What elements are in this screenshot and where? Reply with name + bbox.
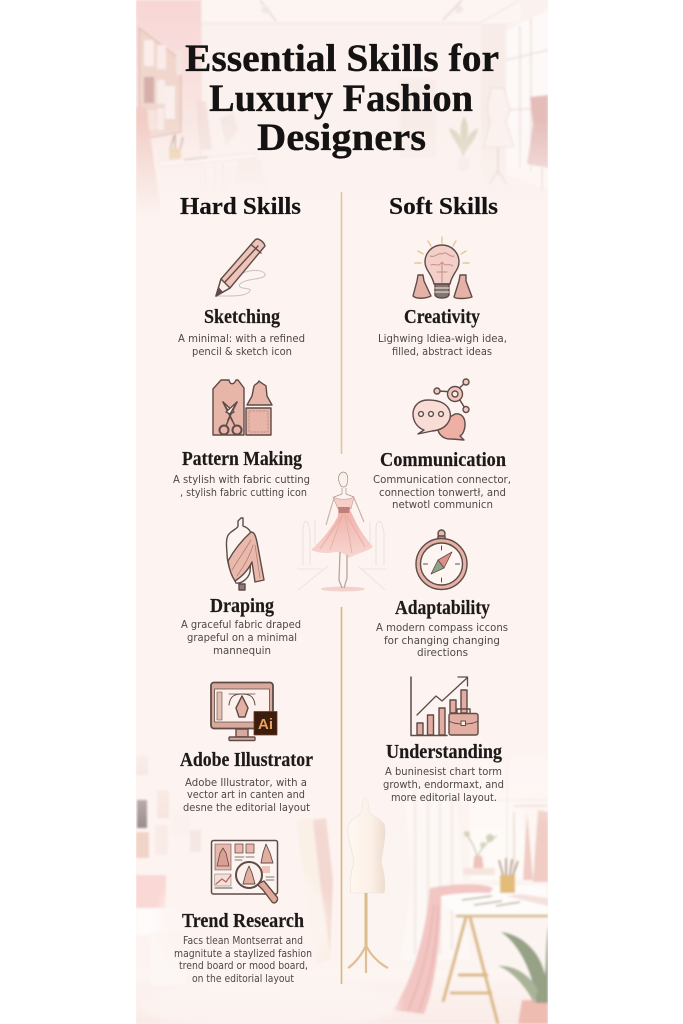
icon: speech bubbles and network xyxy=(413,379,469,440)
description: Lighwing ldiea-wigh idea, xyxy=(378,332,507,345)
panel: draping xyxy=(181,518,301,657)
panel: creativity xyxy=(378,237,507,358)
icon: light bulb with dresses xyxy=(413,237,472,298)
panel: pattern making xyxy=(173,380,310,499)
icon: mood board with magnifying glass xyxy=(212,840,278,903)
heading: Communication xyxy=(380,450,506,471)
icon: monitor with pen tool and Ai badge: Ai xyxy=(258,716,273,733)
heading: hard skills: Hard Skills xyxy=(180,194,301,220)
desk xyxy=(450,886,546,914)
fabric bolts xyxy=(296,818,332,966)
description xyxy=(178,332,305,358)
icon: mannequin with draped fabric xyxy=(226,518,264,590)
heading: Creativity xyxy=(404,307,480,328)
clothes rack xyxy=(514,806,548,882)
description: Facs tlean Montserrat and xyxy=(183,934,303,947)
description: pencil & sketch icon xyxy=(192,345,292,358)
description: netwotl communicn xyxy=(392,498,493,511)
heading: Adaptability xyxy=(395,598,490,619)
soft glow behind trend research text xyxy=(160,896,329,932)
icon: pencil and sketch line xyxy=(216,239,265,296)
draped pink fabric xyxy=(393,884,493,1014)
description xyxy=(378,332,507,358)
heading: soft skills: Soft Skills xyxy=(389,194,498,220)
description xyxy=(376,621,508,659)
description: magnitute a staylized fashion xyxy=(174,947,312,960)
description: filled, abstract ideas xyxy=(392,345,492,358)
panel: understanding xyxy=(383,677,504,804)
panel: trend research xyxy=(174,840,312,985)
description: Adobe Illustrator, with a xyxy=(185,776,307,789)
icon: pattern pieces and scissors xyxy=(213,380,272,435)
top studio room illustration xyxy=(136,0,548,220)
description: A buninesist chart torm xyxy=(385,765,502,778)
description: , stylish fabric cutting icon xyxy=(180,486,307,499)
description: Communication connector, xyxy=(373,473,511,486)
title xyxy=(185,37,499,159)
description: mannequin xyxy=(213,644,271,657)
divider: gold vertical rule xyxy=(340,192,342,984)
description xyxy=(183,776,311,814)
heading: Adobe Illustrator xyxy=(180,750,313,771)
heading: Understanding xyxy=(386,742,502,763)
panel: adobe illustrator xyxy=(180,682,313,814)
description: for changing changing xyxy=(384,634,500,647)
description: vector art in canten and xyxy=(187,788,305,801)
curtains xyxy=(400,790,470,960)
description xyxy=(383,765,504,804)
panel: communication xyxy=(373,379,511,511)
heading: Trend Research xyxy=(182,911,304,932)
panel: adaptability xyxy=(376,530,508,659)
background: fashion studio scene xyxy=(136,0,548,1024)
description: directions xyxy=(417,646,468,659)
icon: growth chart and briefcase xyxy=(411,677,478,736)
description: A graceful fabric draped xyxy=(181,618,301,631)
description xyxy=(373,473,511,511)
window xyxy=(520,790,547,876)
heading: Pattern Making xyxy=(182,449,302,470)
pens cup xyxy=(500,875,515,893)
description: connection tonwertł, and xyxy=(379,486,506,499)
description: more editorial layout. xyxy=(391,791,497,804)
vase and sprig xyxy=(473,856,484,870)
title: Luxury Fashion xyxy=(209,77,473,120)
description xyxy=(181,618,301,657)
description: A modern compass iccons xyxy=(376,621,508,634)
description: trend board or mood board, xyxy=(179,959,308,972)
icon: compass xyxy=(416,530,467,590)
description: A minimal: with a refined xyxy=(178,332,305,345)
mannequin and stand xyxy=(348,798,388,973)
left sofa and gallery xyxy=(136,875,166,910)
title: Designers xyxy=(257,116,426,159)
description: on the editorial layout xyxy=(192,972,295,985)
description xyxy=(174,934,312,985)
description: desne the editorial layout xyxy=(183,801,311,814)
pot and plant xyxy=(518,1000,548,1024)
panel: sketching xyxy=(178,239,305,358)
description xyxy=(173,473,310,499)
illustration: runway model in pink dress xyxy=(297,472,387,592)
heading: Sketching xyxy=(204,307,280,328)
title: Essential Skills for xyxy=(185,37,499,80)
bottom studio room illustration xyxy=(136,735,548,1024)
heading: Draping xyxy=(210,596,274,617)
description: A stylish with fabric cutting xyxy=(173,473,310,486)
description: growth, endormaxt, and xyxy=(383,778,504,791)
description: grapeful on a minimal xyxy=(187,631,297,644)
